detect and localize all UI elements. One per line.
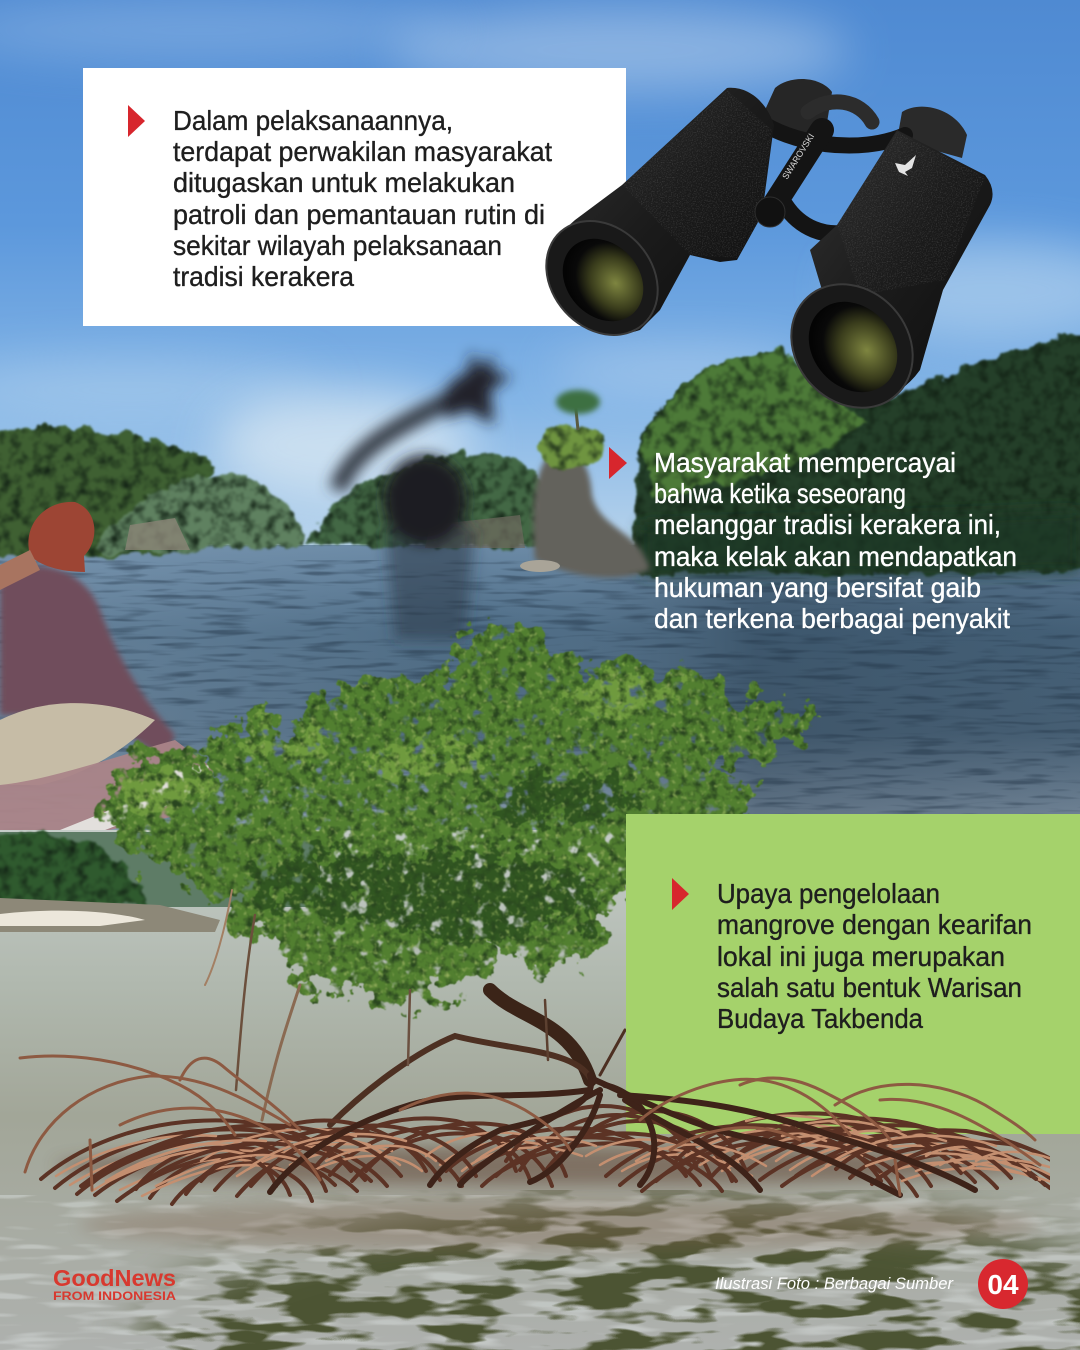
text: warisan budaya: Budaya Takbenda — [717, 1003, 923, 1034]
brand label: SWAROVSKI — [780, 132, 816, 181]
text: patroli: terdapat perwakilan masyarakat — [173, 136, 552, 167]
right barrel — [795, 130, 993, 402]
icon: binoculars — [523, 79, 993, 433]
text block: hukuman gaib — [609, 447, 1017, 634]
photo credit: Ilustrasi Foto : Berbagai Sumber — [715, 1274, 954, 1293]
mangrove trunk and branches — [205, 890, 625, 1125]
bridge — [755, 102, 905, 234]
left eyepiece — [765, 79, 832, 135]
text: warisan budaya: Upaya pengelolaan — [717, 878, 940, 909]
text lines: Masyarakat mempercayai — [654, 447, 956, 478]
text lines: melanggar tradisi kerakera ini, — [654, 509, 1001, 540]
background photo: lake — [0, 545, 1080, 835]
right eyepiece — [897, 107, 967, 158]
left barrel — [548, 88, 774, 334]
background photo: foreground shore and shallow water — [0, 830, 1080, 1350]
ghost silhouette — [338, 350, 512, 640]
panel: white callout — [83, 68, 626, 326]
right objective lens — [766, 259, 938, 433]
text lines: bahwa ketika seseorang — [654, 478, 906, 509]
mangrove prop roots — [20, 1056, 1080, 1204]
text: patroli: sekitar wilayah pelaksanaan — [173, 230, 502, 261]
person on boat — [0, 502, 215, 832]
text lines: maka kelak akan mendapatkan — [654, 541, 1017, 572]
logo: GoodNews from Indonesia: GoodNews — [53, 1265, 176, 1291]
logo: GoodNews from Indonesia — [53, 1265, 176, 1303]
eagle logo — [895, 155, 916, 176]
text: warisan budaya: salah satu bentuk Warisan — [717, 972, 1022, 1003]
page number badge: 04 — [987, 1269, 1019, 1300]
icon: red arrow marker — [672, 878, 689, 910]
mangrove tree crown — [105, 625, 810, 1003]
text: warisan budaya: mangrove dengan kearifan — [717, 909, 1032, 940]
page number badge — [978, 1259, 1028, 1309]
background photo: islands — [0, 325, 1080, 577]
text lines: dan terkena berbagai penyakit — [654, 603, 1010, 634]
text: warisan budaya: lokal ini juga merupakan — [717, 941, 1005, 972]
icon: red arrow marker — [128, 105, 145, 137]
hinge — [755, 197, 785, 227]
text: patroli — [173, 105, 552, 292]
panel: green callout — [626, 814, 1080, 1134]
left objective lens — [523, 198, 681, 358]
text: patroli: Dalam pelaksanaannya, — [173, 105, 453, 136]
text lines: hukuman yang bersifat gaib — [654, 572, 981, 603]
text: warisan budaya — [717, 878, 1032, 1034]
icon: red arrow marker — [609, 447, 627, 479]
text lines — [654, 447, 1017, 634]
text: patroli: ditugaskan untuk melakukan — [173, 167, 515, 198]
text: patroli: tradisi kerakera — [173, 261, 354, 292]
text: patroli: patroli dan pemantauan rutin di — [173, 199, 545, 230]
background photo: sky — [0, 0, 1080, 560]
logo: GoodNews from Indonesia: FROM INDONESIA — [53, 1289, 176, 1303]
